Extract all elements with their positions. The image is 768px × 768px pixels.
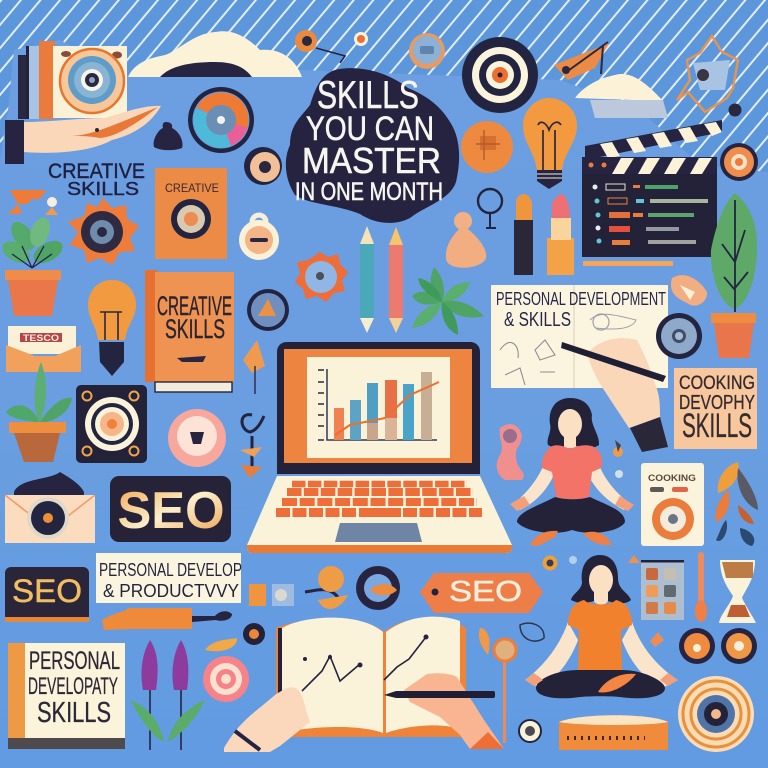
icon: pink figurine [497, 424, 524, 480]
icon: left hand holding book [224, 687, 310, 752]
icon: orange disc [461, 121, 513, 173]
icon: orange compass arrow [554, 42, 609, 80]
heading: creative skills: CREATIVE [48, 160, 145, 183]
icon: envelope with ticket: TESCO [23, 333, 59, 343]
icon: colour gauge dial [188, 87, 254, 153]
icon: orange ball [318, 566, 348, 609]
icon: writing hand with pen [561, 338, 668, 452]
icon: tiny dark disc right [728, 104, 742, 116]
panel: personal development book card [8, 643, 125, 749]
panel: personal develop productivity label: & PRODUCTVVY [103, 581, 239, 601]
panel: personal develop productivity label [96, 553, 242, 603]
icon: small ring near tag [542, 555, 640, 570]
icon: padlock badge [409, 33, 445, 69]
icon: potted plant second [6, 362, 72, 462]
panel: personal development notebook [491, 285, 668, 388]
icon: hourglass [719, 560, 756, 623]
icon: magnifier with orange handle [479, 623, 544, 743]
icon: purple flowers [130, 640, 205, 750]
icon: orange marker tool [102, 608, 232, 630]
title blob with heading [286, 68, 459, 223]
icon: cooking gear card [641, 463, 704, 546]
icon: potted plant left [0, 215, 66, 316]
icon: cream dome [575, 74, 668, 118]
icon: dark monogram badge [519, 720, 541, 742]
heading: creative skills: SKILLS [67, 179, 139, 199]
icon: big orange concentric target [678, 676, 754, 752]
icon: food grid tablet [641, 560, 684, 620]
icon: small orange badges top centre [295, 30, 368, 63]
panel: bullseye target [462, 37, 538, 113]
icon: cream cloud with dark hump [128, 31, 302, 77]
icon: tree in pot [711, 193, 757, 358]
icon: pink swirl [203, 656, 249, 702]
icon: small scattered tiles [249, 584, 340, 606]
icon: wooden peg figure [446, 212, 486, 268]
icon: orange target far right [720, 143, 758, 181]
icon: coral pencil [389, 227, 403, 333]
panel: personal development notebook: PERSONAL DEVELOPMENT [496, 289, 666, 309]
icon: orange ornament leaf [650, 632, 664, 647]
panel: cooking skills card [674, 368, 757, 449]
panel: laptop with chart [247, 342, 512, 553]
title blob with heading: IN ONE MONTH [295, 178, 443, 206]
panel: orange creative cover: CREATIVE [165, 181, 219, 195]
icon: cooking gear card: COOKING [648, 473, 696, 483]
title blob with heading: YOU CAN [306, 110, 434, 148]
icon: sun gear [295, 252, 348, 302]
panel: personal develop productivity label: PERSONAL DEVELOP [99, 560, 242, 580]
icon: orange drum with waveform [559, 715, 668, 750]
panel: SEO dark badge small: SEO [12, 573, 82, 609]
panel: personal development book card: SKILLS [37, 697, 111, 729]
panel: creative skills book [145, 270, 234, 392]
panel: SEO dark badge large: SEO [118, 482, 224, 540]
title blob with heading: SKILLS [317, 74, 419, 117]
icon: padlock ring [239, 215, 279, 260]
panel: creative skills book: CREATIVE [157, 291, 232, 321]
icon: two round food badges [679, 628, 757, 664]
panel: orange creative cover [155, 168, 227, 259]
icon: dark lipstick [514, 194, 533, 275]
title blob with heading: MASTER [302, 140, 441, 181]
icon: green star leaf [412, 267, 484, 335]
panel: open book with chart [276, 617, 466, 737]
icon: orange flower [68, 198, 139, 265]
icon: round lens with orange sail [247, 289, 289, 331]
panel: personal development notebook: & SKILLS [504, 309, 571, 331]
icon: dark pouch [154, 122, 183, 150]
icon: small orange leaf sprig [243, 340, 265, 394]
panel: personal development book card: PERSONAL [29, 647, 120, 675]
icon: orange lightbulb left [88, 280, 136, 376]
icon: right hand with pen [384, 673, 504, 749]
icon: woman meditating orange shirt [525, 555, 678, 698]
panel: SEO dark badge small [5, 567, 89, 622]
panel: clapperboard checklist [582, 120, 722, 266]
icon: dark sprig [240, 415, 264, 478]
icon: dark badge and lemon [205, 623, 265, 651]
icon: falling leaves [716, 462, 758, 546]
heading: creative skills [48, 160, 145, 199]
panel: creative skills book: SKILLS [165, 314, 225, 344]
icon: teal pencil [360, 226, 374, 333]
icon: small dark disc cluster [613, 440, 623, 478]
icon: small orange hat shapes [8, 190, 58, 215]
icon: orange lightbulb right [523, 98, 577, 189]
icon: dark round ring [356, 566, 400, 610]
icon: pink ring [168, 409, 226, 467]
icon: woman meditating coral shirt [510, 398, 634, 546]
panel: personal development book card: DEVELOPATY [28, 673, 118, 700]
panel: SEO orange tag: SEO [449, 576, 522, 608]
icon: ornate shield [677, 36, 738, 112]
panel: SEO orange tag [420, 573, 543, 613]
icon: pink lipstick [547, 194, 574, 275]
icon: envelope with ticket [6, 326, 81, 372]
icon: magnifier check [478, 189, 502, 228]
icon: square dark speaker [76, 385, 147, 463]
icon: eye lens [244, 147, 282, 185]
icon: orange tag emblem [671, 275, 707, 306]
panel: cooking skills card: COOKING [679, 373, 755, 394]
icon: camera envelope [5, 472, 95, 543]
icon: spoon [695, 552, 707, 622]
icon: dark lens [656, 313, 702, 359]
icon: books and target card with offering hand [5, 41, 161, 164]
